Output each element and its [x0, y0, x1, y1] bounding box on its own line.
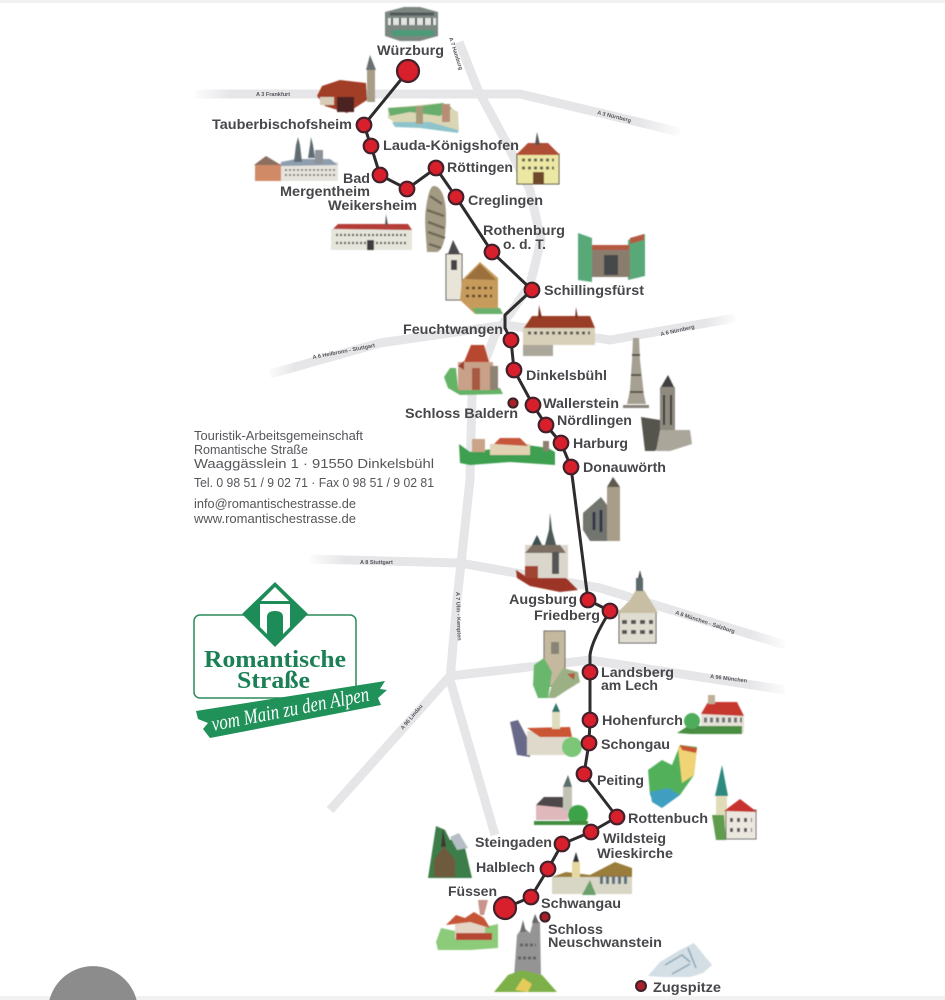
- icon: Feuchtwangen abbey: [523, 305, 595, 356]
- icon: Lauda bridge: [388, 103, 459, 133]
- contact details: www.romantischestrasse.de: [193, 511, 356, 526]
- icon: Harburg castle: [459, 438, 555, 465]
- road labels: A 8 Stuttgart: [360, 560, 393, 566]
- city labels: Feuchtwangen: [403, 321, 503, 337]
- city labels: Steingaden: [475, 834, 552, 850]
- city labels: Schongau: [601, 736, 670, 752]
- road labels: A 6 Nürnberg: [660, 324, 695, 338]
- road labels: A 8 München - Salzburg: [674, 610, 735, 635]
- road labels: A 7 Ulm - Kempten: [454, 592, 462, 641]
- road labels: [256, 37, 748, 731]
- city labels: am Lech: [601, 677, 658, 693]
- icon: Dinkelsbühl gate: [444, 345, 503, 395]
- city labels: Neuschwanstein: [548, 934, 662, 950]
- city labels: Landsberg: [601, 664, 674, 680]
- icon: Zugspitze mountain: [648, 943, 712, 977]
- city labels: Würzburg: [377, 42, 444, 58]
- city labels: Rothenburg: [483, 222, 565, 238]
- city labels: Füssen: [448, 883, 497, 899]
- city labels: Friedberg: [534, 607, 600, 623]
- contact details: Tel. 0 98 51 / 9 02 71 · Fax 0 98 51 / 9 02 81: [194, 475, 434, 490]
- icon: Augsburg town hall: [516, 513, 578, 592]
- city labels: Wildsteig: [603, 830, 666, 846]
- road labels: A 96 Lindau: [400, 704, 424, 731]
- city labels: Röttingen: [447, 159, 513, 175]
- city labels: Donauwörth: [583, 459, 666, 475]
- city labels: Dinkelsbühl: [526, 367, 607, 383]
- city labels: Tauberbischofsheim: [212, 116, 352, 132]
- city labels: Creglingen: [468, 192, 543, 208]
- city labels: Nördlingen: [557, 412, 632, 428]
- icon: Würzburg residence: [385, 7, 438, 41]
- contact details: Romantische Straße: [194, 442, 308, 457]
- icon: Wieskirche: [552, 852, 632, 895]
- icon: Schillingsfürst castle: [578, 233, 645, 282]
- road labels: A 7 Hamburg: [447, 37, 463, 71]
- logo: Romantische Straße: Straße: [237, 668, 310, 694]
- contact details: info@romantischestrasse.de: [194, 496, 356, 511]
- city labels: Harburg: [573, 435, 628, 451]
- road labels: A 3 Frankfurt: [256, 92, 290, 98]
- contact details: [193, 428, 434, 526]
- side stops: [508, 398, 646, 991]
- city labels: Zugspitze: [653, 979, 721, 995]
- icon: Hohenfurch chapel: [677, 695, 744, 734]
- city labels: Halblech: [476, 859, 535, 875]
- road labels: A 96 München: [710, 674, 748, 685]
- icon: church with tree: [534, 775, 588, 825]
- road labels: A 3 Nürnberg: [597, 110, 632, 124]
- contact details: Waaggässlein 1 · 91550 Dinkelsbühl: [194, 456, 434, 471]
- city labels: Weikersheim: [328, 197, 417, 213]
- logo: Romantische Straße: vom Main zu den Alpen: [209, 682, 371, 736]
- icon: Röttingen town hall: [516, 132, 560, 184]
- road labels: A 6 Heilbronn - Stuttgart: [312, 343, 376, 361]
- city labels: [212, 42, 721, 995]
- logo: Romantische Straße: Romantische: [204, 647, 346, 673]
- icon: Neuschwanstein: [494, 914, 557, 992]
- city labels: o. d. T.: [503, 236, 546, 252]
- icon: Landsberg gate: [533, 631, 580, 698]
- icon: Tauberbischofsheim castle: [317, 55, 376, 113]
- icon: Peiting landscape: [648, 745, 697, 808]
- icon: Rottenbuch tower: [712, 765, 757, 840]
- icon: Rothenburg town: [446, 240, 503, 314]
- route line: [364, 71, 617, 908]
- city labels: Schloss: [548, 921, 603, 937]
- city labels: Bad: [343, 170, 370, 186]
- icon: Füssen castle: [436, 900, 498, 950]
- city labels: Rottenbuch: [628, 810, 708, 826]
- city labels: Hohenfurch: [602, 712, 683, 728]
- city labels: Lauda-Königshofen: [383, 137, 519, 153]
- icon: stone statue: [425, 186, 446, 252]
- city labels: Peiting: [597, 772, 644, 788]
- icon: Wallerstein column: [623, 338, 649, 408]
- icon: Donauwörth church: [583, 477, 620, 541]
- icon: Steingaden forest chapel: [428, 826, 472, 878]
- city labels: Mergentheim: [280, 183, 370, 199]
- city labels: Wieskirche: [597, 845, 673, 861]
- city labels: Wallerstein: [543, 395, 619, 411]
- grey corner arc: [49, 966, 137, 1000]
- icon: Friedberg town hall: [617, 570, 658, 643]
- logo: Romantische Straße: [194, 582, 387, 738]
- city labels: Schillingsfürst: [544, 282, 644, 298]
- motorway network: [195, 42, 785, 835]
- city labels: Augsburg: [509, 591, 577, 607]
- route stops: [357, 60, 624, 919]
- icon: Schongau buildings: [510, 703, 582, 757]
- icon: Bad Mergentheim palace: [254, 137, 338, 181]
- icon: Weikersheim palace: [331, 214, 412, 250]
- city labels: Schwangau: [541, 895, 621, 911]
- city labels: Schloss Baldern: [405, 405, 518, 421]
- icon: Nördlingen church: [641, 375, 692, 451]
- contact details: Touristik-Arbeitsgemeinschaft: [194, 428, 363, 443]
